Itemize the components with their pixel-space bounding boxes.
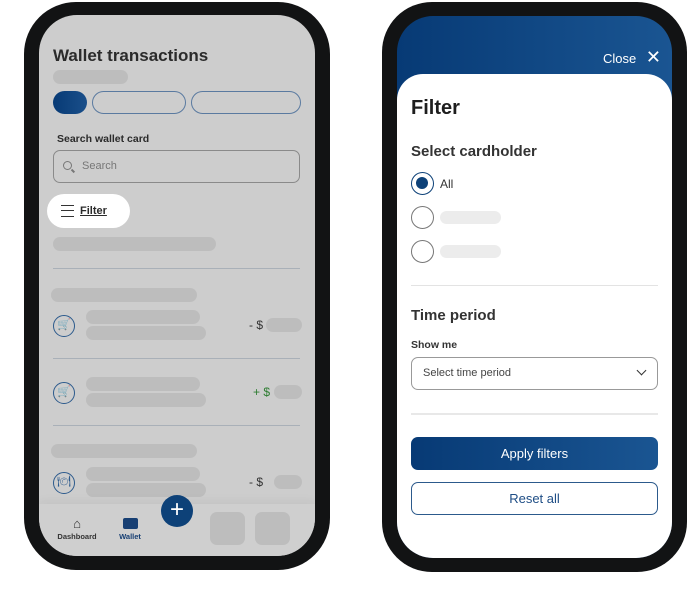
- select dropdown: Select time period: [423, 367, 511, 379]
- select dropdown: [411, 357, 658, 390]
- radio option 2: [411, 206, 501, 229]
- right phone: [382, 2, 687, 572]
- tabs: [53, 91, 301, 114]
- transaction row 2: [53, 377, 302, 407]
- search box: [53, 150, 300, 183]
- close button: Close ✕: [603, 47, 661, 67]
- plus button: +: [170, 496, 184, 523]
- transaction row 1: [53, 310, 302, 340]
- transaction row 3: - $: [249, 475, 263, 489]
- nav: Wallet: [119, 518, 141, 541]
- title: Wallet transactions: Wallet transactions: [53, 46, 208, 65]
- left phone: [24, 2, 330, 570]
- filter button highlight: Filter: [80, 205, 107, 217]
- label: Show me: Show me: [411, 339, 457, 351]
- left screen: [39, 15, 315, 556]
- nav: Dashboard: Dashboard: [57, 532, 97, 541]
- button: Apply filters: [411, 437, 658, 470]
- button: Reset all: [411, 482, 658, 515]
- heading: Time period: Time period: [411, 307, 496, 324]
- transaction row 1: - $: [249, 318, 263, 332]
- filter sheet: [397, 74, 672, 558]
- right screen: [397, 16, 672, 558]
- radio: All: All: [440, 177, 453, 191]
- transaction row 3: [53, 467, 302, 497]
- radio: All: [411, 172, 453, 195]
- filter button highlight: [47, 194, 130, 228]
- nav: Wallet: Wallet: [119, 532, 141, 541]
- icon: sliders: [61, 205, 74, 217]
- nav: Dashboard: [57, 516, 97, 541]
- heading: Filter: Filter: [411, 97, 460, 119]
- bottom nav: [39, 504, 315, 556]
- heading: Select cardholder: Select cardholder: [411, 143, 537, 160]
- search box: Search: [82, 160, 117, 172]
- transaction row 2: + $: [253, 385, 270, 399]
- button: Apply filters: Apply filters: [501, 446, 568, 461]
- button: Reset all: Reset all: [509, 491, 560, 506]
- transaction row 1: 🛒: [57, 319, 71, 331]
- plus button: [161, 495, 193, 527]
- radio option 3: [411, 240, 501, 263]
- label: Search wallet card: Search wallet card: [57, 133, 149, 145]
- nav: Dashboard: ⌂: [73, 516, 81, 531]
- transaction row 2: 🛒: [57, 386, 71, 398]
- transaction row 3: 🍽: [57, 476, 71, 488]
